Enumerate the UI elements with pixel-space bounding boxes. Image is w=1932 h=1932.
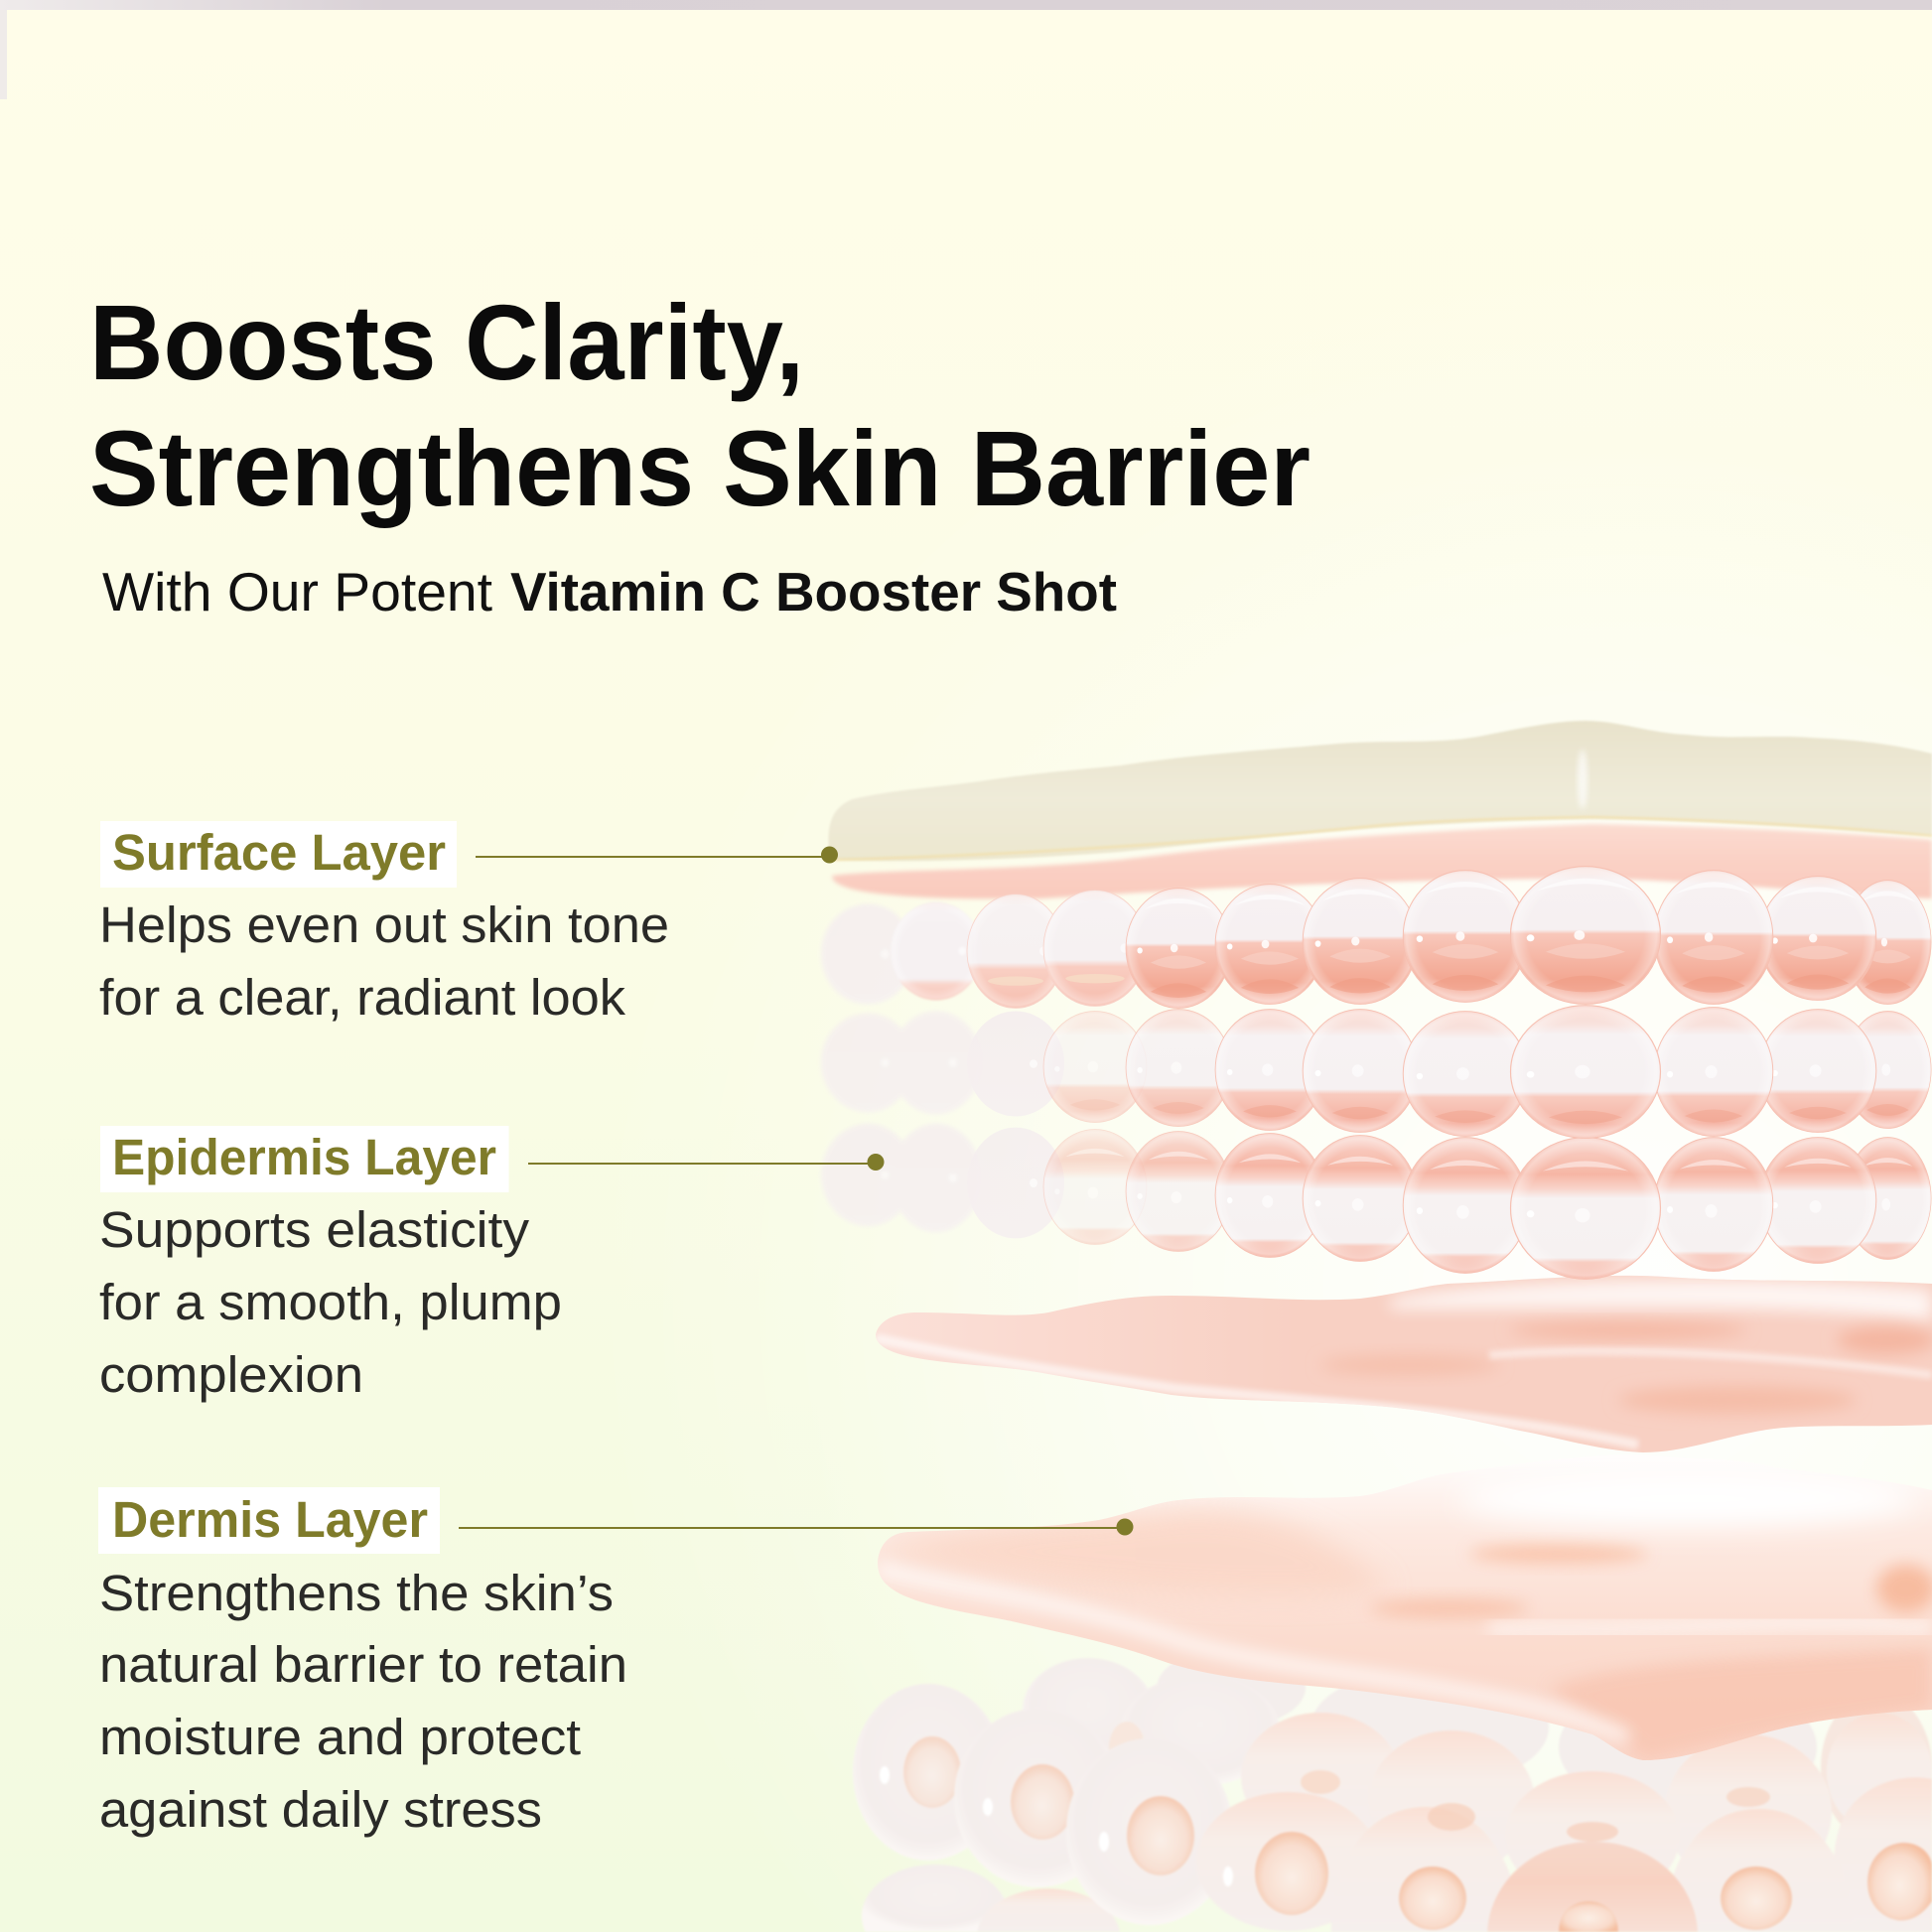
subtitle: With Our Potent (102, 561, 492, 622)
text: epidermis layer description (99, 1201, 562, 1403)
sphere row 1 (821, 867, 1931, 1008)
text: dermis layer description: natural barrier to retain (99, 1636, 627, 1693)
label: dermis layer: Dermis Layer (112, 1491, 428, 1548)
text: dermis layer description: Strengthens the skin’s (99, 1565, 614, 1621)
text: surface layer description: Helps even out skin tone (99, 897, 669, 953)
text: surface layer description (99, 897, 669, 1026)
text: dermis layer description (99, 1565, 627, 1838)
title: Strengthens Skin Barrier (89, 408, 1311, 528)
text: dermis layer description: against daily stress (99, 1781, 542, 1838)
surface cream layer (829, 721, 1932, 861)
label: epidermis layer: Epidermis Layer (112, 1129, 496, 1185)
middle ribbon (874, 1271, 1932, 1459)
title: Boosts Clarity, (89, 282, 804, 402)
skin cross-section illustration: bottom cell layer (853, 1648, 1932, 1932)
leader line: epidermis layer (528, 1154, 884, 1171)
sphere row 2 (821, 1006, 1931, 1138)
text: epidermis layer description: complexion (99, 1346, 363, 1403)
subtitle: Vitamin C Booster Shot (510, 561, 1117, 622)
subtitle (102, 561, 1117, 622)
pink layer under surface (832, 824, 1932, 898)
text: surface layer description: for a clear, radiant look (99, 969, 626, 1026)
text: epidermis layer description: for a smooth, plump (99, 1274, 562, 1330)
title (89, 282, 1311, 528)
label: surface layer: Surface Layer (112, 824, 446, 881)
text: dermis layer description: moisture and protect (99, 1709, 581, 1765)
dermis ribbon (878, 1484, 1932, 1760)
text: epidermis layer description: Supports elasticity (99, 1201, 530, 1258)
leader line: dermis layer (459, 1519, 1134, 1535)
leader line: surface layer (476, 846, 838, 864)
sphere row 3 (821, 1124, 1931, 1279)
